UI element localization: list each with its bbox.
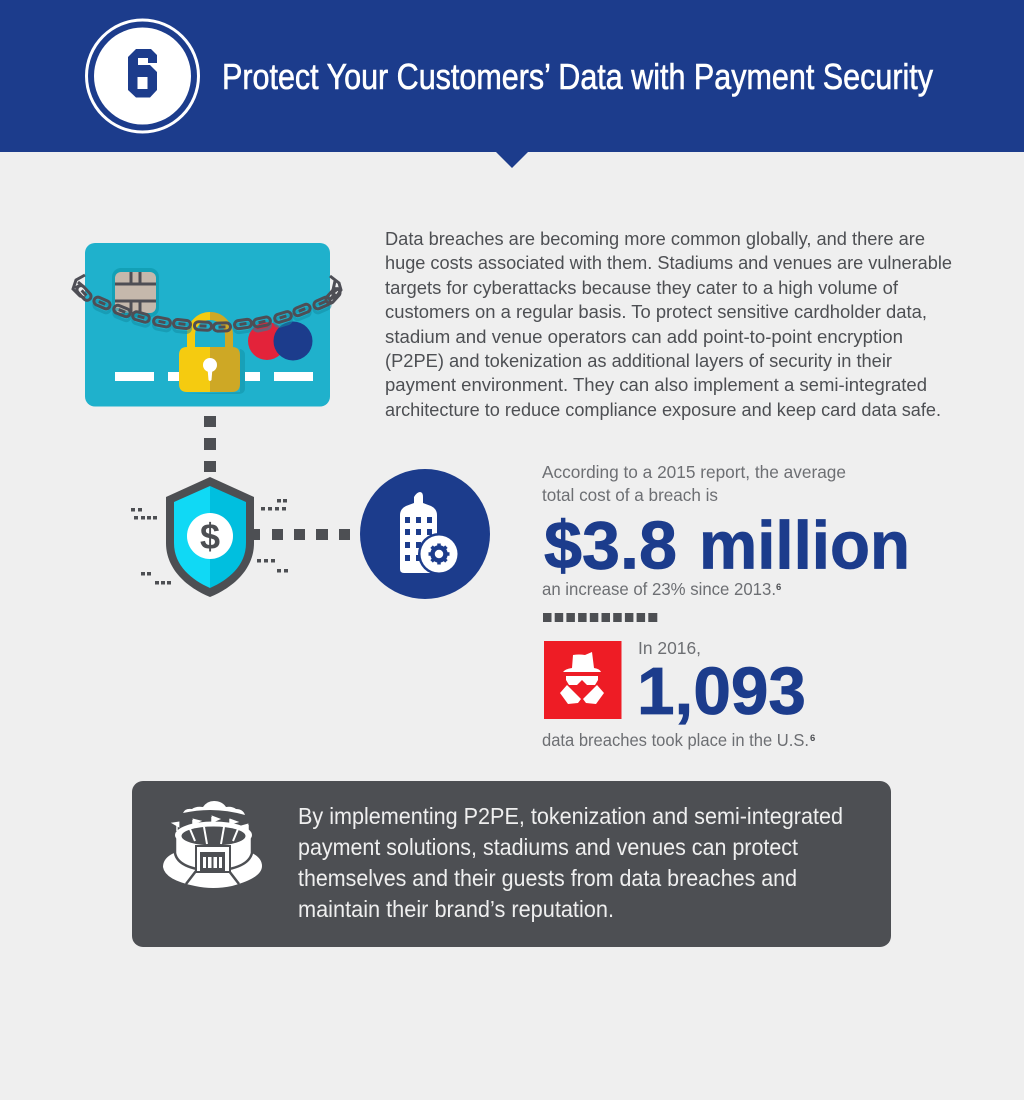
icon: security shield <box>166 477 254 597</box>
header banner <box>0 0 1024 168</box>
card chip <box>112 268 159 317</box>
stat: breaches in 2016: data breaches took place in the U.S. <box>542 730 809 750</box>
dotted divider <box>543 613 657 622</box>
intro paragraph: stadium and venue operators can add point-to-point encryption <box>385 327 903 347</box>
intro paragraph: customers on a regular basis. To protect sensitive cardholder data, <box>385 302 927 322</box>
padlock body <box>179 347 245 394</box>
stat: cost of a breach: million <box>699 508 910 584</box>
stat: cost of a breach: an increase of 23% since 2013. <box>542 579 776 599</box>
callout panel <box>132 781 891 947</box>
intro paragraph: (P2PE) and tokenization as additional layers of security in their <box>385 351 892 371</box>
stat: cost of a breach: 6 <box>776 582 781 593</box>
intro paragraph: payment environment. They can also implement a semi-integrated <box>385 375 927 395</box>
callout text: By implementing P2PE, tokenization and semi-integrated <box>298 803 843 829</box>
padlock shackle <box>191 316 229 350</box>
stat: cost of a breach: According to a 2015 report, the average <box>542 462 846 482</box>
shield sparkle dots <box>131 499 288 584</box>
icon: hacker <box>544 641 622 719</box>
chain <box>73 275 342 333</box>
card logo circles <box>248 322 312 360</box>
intro paragraph: targets for cyberattacks because they cater to a high volume of <box>385 278 899 298</box>
intro paragraph: huge costs associated with them. Stadiums and venues are vulnerable <box>385 253 952 273</box>
callout text: maintain their brand’s reputation. <box>298 896 614 922</box>
icon: stadium <box>163 801 262 888</box>
icon: locked credit card <box>73 243 342 406</box>
stat: cost of a breach: total cost of a breach is <box>542 485 718 505</box>
icon: building with gear <box>360 469 490 599</box>
dotted connector: shield to building <box>253 529 350 540</box>
intro paragraph: architecture to reduce compliance exposure and keep card data safe. <box>385 400 941 420</box>
stat: breaches in 2016 <box>542 638 815 750</box>
callout text: payment solutions, stadiums and venues can protect <box>298 834 799 860</box>
stat: cost of a breach <box>542 462 910 599</box>
callout text <box>298 803 843 922</box>
number badge <box>85 18 200 134</box>
card number dashes <box>115 372 313 381</box>
stat: breaches in 2016: In 2016, <box>638 638 701 658</box>
stat: breaches in 2016: 6 <box>810 733 815 744</box>
stat: cost of a breach: $3.8 <box>544 508 677 584</box>
callout text: themselves and their guests from data breaches and <box>298 865 797 891</box>
icon: security shield: $ <box>200 516 220 557</box>
dotted connector: card to shield <box>204 416 216 472</box>
intro paragraph: Data breaches are becoming more common globally, and there are <box>385 229 925 249</box>
stat: breaches in 2016: 1,093 <box>637 654 806 729</box>
intro paragraph <box>385 229 952 420</box>
